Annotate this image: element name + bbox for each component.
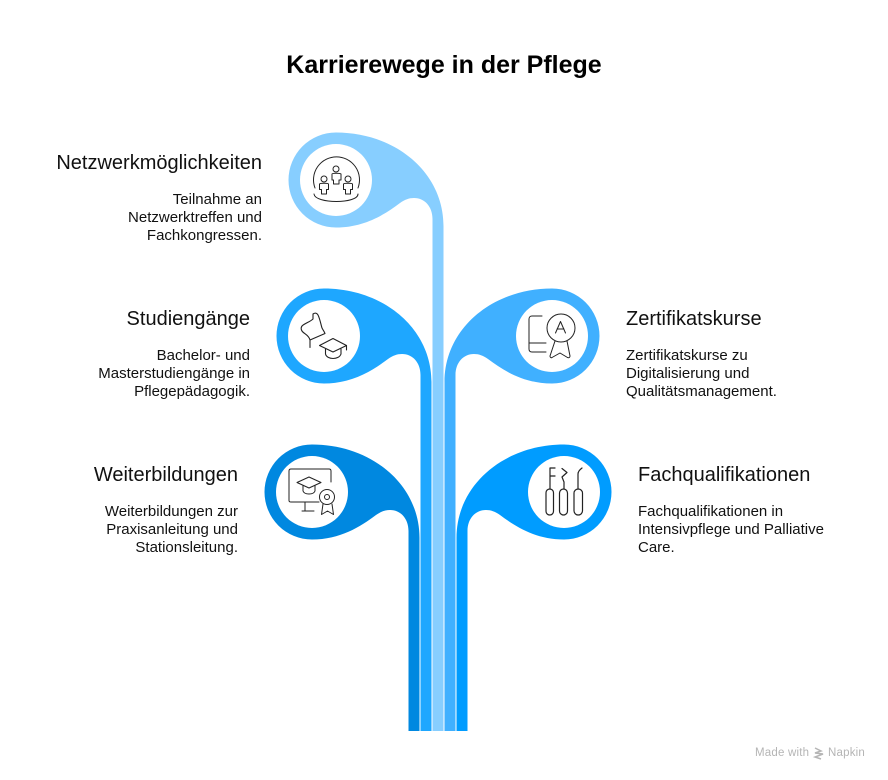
text: Fachqualifikationen: Intensivpflege und Palliative: [638, 521, 824, 538]
text: Weiterbildungen: Stationsleitung.: [135, 539, 238, 556]
text: Zertifikatskurse: [626, 347, 777, 400]
text: Zertifikatskurse: Zertifikatskurse zu: [626, 347, 748, 364]
text: Studiengänge: Masterstudiengänge in: [98, 365, 250, 382]
branch: Studiengänge: [277, 288, 432, 731]
text: Weiterbildungen: Praxisanleitung und: [106, 521, 238, 538]
text: Zertifikatskurse: Qualitätsmanagement.: [626, 383, 777, 400]
branch: Weiterbildungen: [264, 444, 420, 731]
heading: Weiterbildungen: Weiterbildungen: [94, 464, 238, 486]
icon: dental instruments: [546, 468, 582, 515]
icon: flag and graduation cap: [301, 313, 346, 358]
watermark: [755, 747, 865, 760]
text: Zertifikatskurse: Digitalisierung und: [626, 365, 749, 382]
text: Studiengänge: Pflegepädagogik.: [134, 383, 250, 400]
text: Netzwerkmöglichkeiten: Teilnahme an: [173, 191, 262, 208]
text: Netzwerkmöglichkeiten: [128, 191, 262, 244]
branch: Fachqualifikationen: [456, 444, 612, 731]
branch: Zertifikatskurse: [444, 288, 600, 731]
heading: Netzwerkmöglichkeiten: Netzwerkmöglichkeiten: [56, 152, 262, 174]
text: Netzwerkmöglichkeiten: Netzwerktreffen und: [128, 209, 262, 226]
text: Fachqualifikationen: Care.: [638, 539, 675, 556]
text: Weiterbildungen: [105, 503, 238, 556]
text: Fachqualifikationen: Fachqualifikationen in: [638, 503, 783, 520]
icon: monitor with graduation cap and ribbon: [289, 469, 334, 514]
heading: Zertifikatskurse: Zertifikatskurse: [626, 308, 762, 330]
title: Karrierewege in der Pflege: [286, 51, 602, 79]
text: Fachqualifikationen: [638, 503, 824, 556]
watermark: Napkin: [828, 747, 865, 759]
heading: Studiengänge: Studiengänge: [127, 308, 250, 330]
branch: Netzwerkmöglichkeiten: [289, 132, 444, 731]
text: Studiengänge: Bachelor- und: [157, 347, 250, 364]
watermark: Made with: [755, 747, 809, 759]
icon: certificate with A badge: [529, 314, 575, 358]
heading: Fachqualifikationen: Fachqualifikationen: [638, 464, 810, 486]
text: Studiengänge: [98, 347, 250, 400]
text: Weiterbildungen: Weiterbildungen zur: [105, 503, 238, 520]
text: Netzwerkmöglichkeiten: Fachkongressen.: [147, 227, 262, 244]
icon: people under dome: [314, 157, 360, 202]
